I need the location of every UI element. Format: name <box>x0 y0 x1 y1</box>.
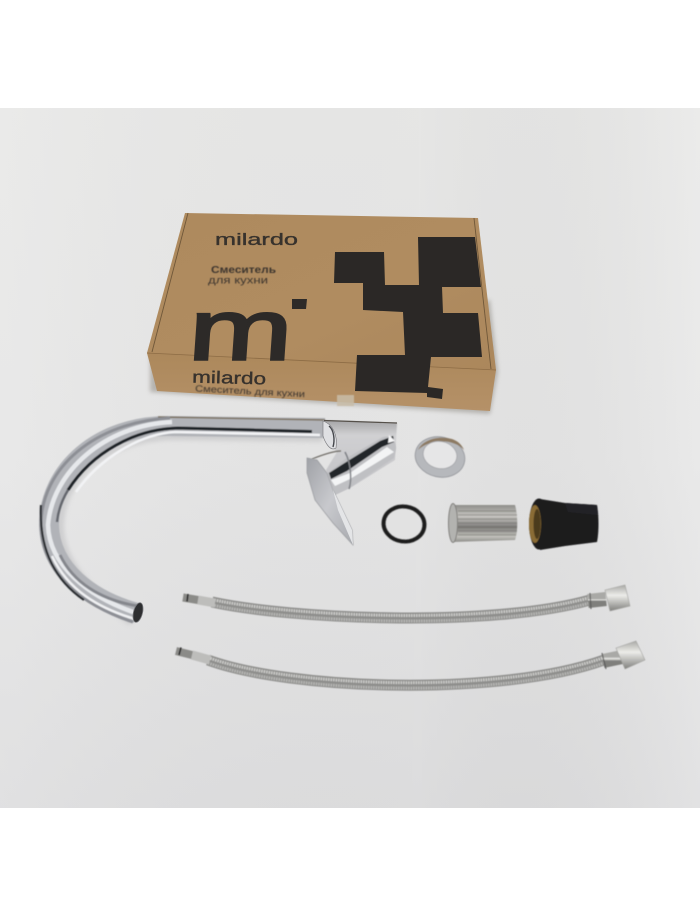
hose 1 right fitting <box>588 599 606 601</box>
brand name top: milardo <box>215 231 298 249</box>
black pixel pattern <box>334 237 482 399</box>
spout top tan reflection <box>158 417 325 420</box>
photo background <box>0 108 700 808</box>
product title top: Смеситель <box>211 265 276 276</box>
spout dark edge lower <box>41 505 84 600</box>
box side flaps <box>152 213 491 369</box>
spout <box>41 417 325 622</box>
flexible hose 2 <box>176 641 645 688</box>
brand name front: milardo <box>192 368 266 388</box>
chrome ring <box>411 432 469 482</box>
black nut <box>529 498 598 550</box>
hose 1 left fitting <box>198 600 215 603</box>
spout dark reflection <box>68 428 312 490</box>
box top face <box>147 213 496 370</box>
lever handle <box>307 458 353 545</box>
hose 2 right fitting <box>603 657 622 661</box>
product title front: Смеситель для кухни <box>195 384 305 399</box>
cardboard box <box>147 213 498 414</box>
faucet shadow <box>60 436 322 622</box>
faucet <box>41 417 397 623</box>
spout light band <box>48 422 172 613</box>
barcode sticker <box>337 395 354 406</box>
flexible hose 1 <box>183 585 630 621</box>
hose 2 left fitting <box>192 655 210 660</box>
logo dot <box>292 299 307 309</box>
spout highlight <box>76 432 320 492</box>
product title top <box>208 265 276 286</box>
faucet body <box>323 420 397 495</box>
product title top: для кухни <box>208 276 268 286</box>
threaded tube <box>448 504 517 542</box>
neck joint <box>323 421 336 449</box>
spout outer edge <box>41 418 170 622</box>
spout mouth <box>131 602 145 623</box>
cartridge chrome <box>312 435 396 494</box>
rubber o-ring <box>381 504 427 544</box>
box front face <box>147 353 496 411</box>
box shadow <box>150 300 498 414</box>
logo m: m <box>186 282 296 378</box>
